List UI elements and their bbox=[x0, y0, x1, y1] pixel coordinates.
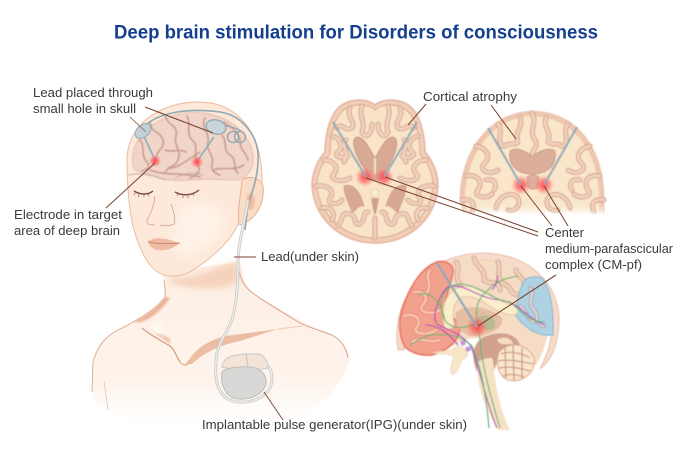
label: lead placed through small hole: small hole in skull bbox=[33, 102, 136, 116]
axial brain section bbox=[312, 100, 438, 243]
illustration: head and torso with implanted system bbox=[92, 102, 350, 434]
label: lead under skin: Lead(under skin) bbox=[261, 250, 359, 264]
cerebellum bbox=[497, 345, 534, 381]
brainstem bbox=[477, 358, 510, 430]
closed eyes, nose and lips bbox=[134, 190, 199, 250]
label: electrode in target area bbox=[14, 208, 123, 238]
label: CM-pf complex bbox=[545, 226, 673, 272]
head bbox=[127, 102, 263, 276]
implantable pulse generator bbox=[222, 354, 268, 399]
fiber tracts bbox=[410, 276, 545, 428]
label: implantable pulse generator: Implantable pulse generator(IPG)(under skin) bbox=[202, 418, 467, 432]
label: CM-pf complex: medium-parafascicular bbox=[545, 242, 673, 256]
sagittal brain section bbox=[397, 253, 559, 430]
coronal brain section bbox=[455, 111, 610, 221]
torso bbox=[92, 262, 350, 434]
label: lead placed through small hole bbox=[33, 86, 153, 116]
label: lead placed through small hole: Lead placed through bbox=[33, 86, 153, 100]
leader lines bbox=[106, 104, 568, 420]
hypothalamus and pituitary bbox=[432, 345, 468, 375]
label: electrode in target area: area of deep brain bbox=[14, 224, 120, 238]
label: electrode in target area: Electrode in target bbox=[14, 208, 123, 222]
blue occipital region bbox=[515, 277, 553, 335]
brain body bbox=[402, 260, 551, 366]
neck lead under skin bbox=[216, 200, 272, 402]
title: Deep brain stimulation for Disorders of consciousness bbox=[114, 22, 598, 44]
label: CM-pf complex: complex (CM-pf) bbox=[545, 258, 642, 272]
skull bbox=[397, 253, 559, 369]
implanted leads and burr hole caps bbox=[132, 111, 258, 230]
brown mid-brain band bbox=[473, 333, 528, 372]
corpus callosum and thalamus bbox=[456, 307, 502, 336]
label: cortical atrophy: Cortical atrophy bbox=[423, 90, 518, 104]
label: CM-pf complex: Center bbox=[545, 226, 584, 240]
brain in head bbox=[128, 112, 253, 181]
red frontal region bbox=[400, 261, 460, 355]
